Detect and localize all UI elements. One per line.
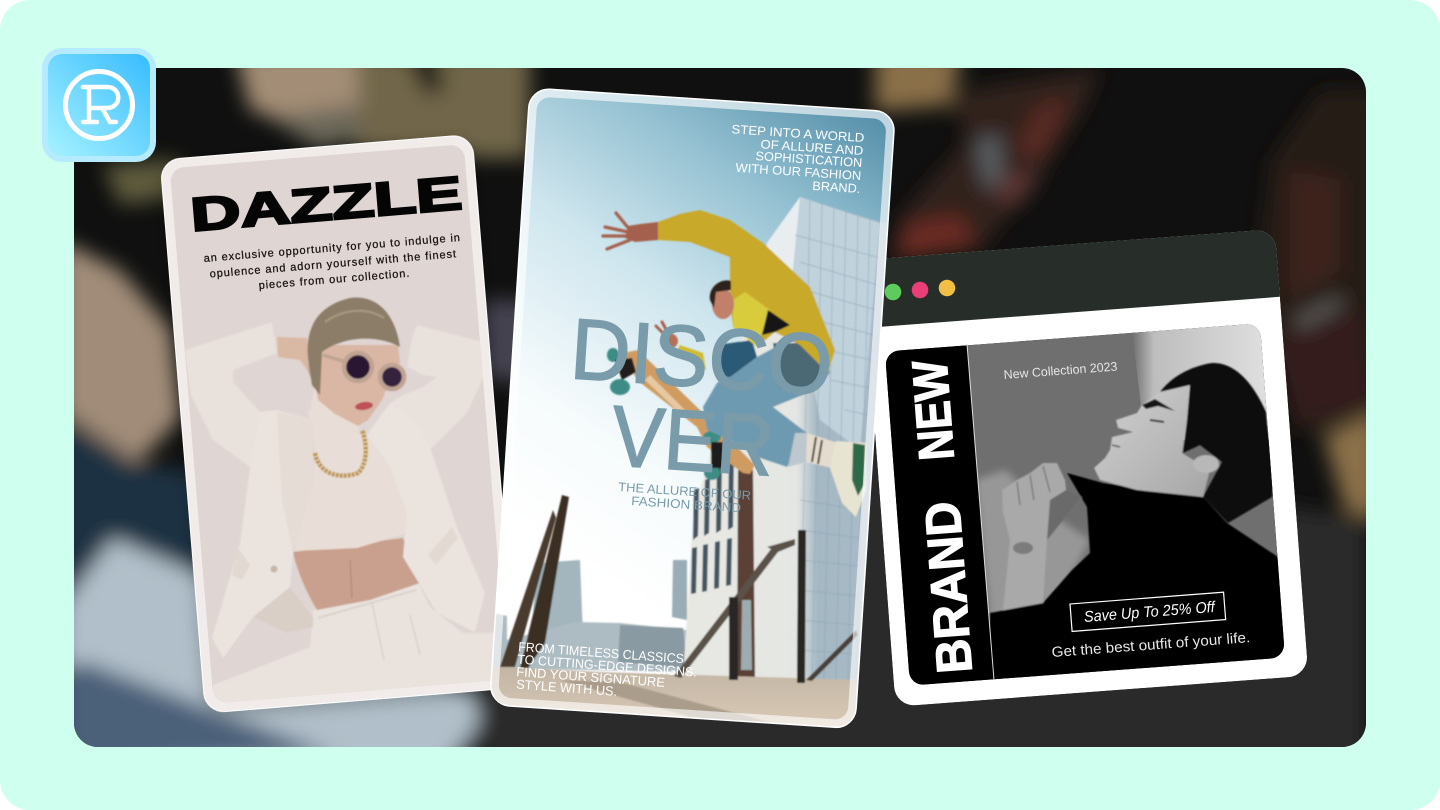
laptop bbox=[60, 538, 480, 770]
railing posts left bbox=[520, 495, 569, 668]
crop top bbox=[295, 410, 407, 551]
card: Discover poster bbox=[480, 80, 910, 740]
head bbox=[712, 289, 734, 319]
distant buildings bbox=[530, 560, 584, 650]
black title strip bbox=[870, 330, 994, 700]
windows bbox=[691, 448, 734, 594]
ear bbox=[1193, 455, 1219, 473]
left pocket flap bbox=[232, 550, 249, 579]
bottom text: TO CUTTING-EDGE DESIGNS. bbox=[517, 652, 697, 680]
vertical title: NEW bbox=[902, 358, 965, 462]
face bbox=[314, 345, 400, 426]
neck bbox=[312, 388, 358, 431]
sock bbox=[806, 433, 838, 468]
divider line bbox=[967, 344, 994, 680]
lips line bbox=[1112, 445, 1120, 447]
heading: DISCOVER: VER bbox=[609, 388, 777, 495]
poster description: pieces from our collection. bbox=[258, 268, 410, 292]
card: Dazzle poster bbox=[160, 135, 502, 721]
vertical title bbox=[902, 358, 983, 675]
top text: SOPHISTICATION bbox=[755, 149, 863, 170]
bare midriff bbox=[293, 538, 420, 610]
sunglasses bbox=[323, 353, 404, 389]
tagline: Get the best outfit of your life. bbox=[1051, 630, 1251, 661]
subheading: FASHION BRAND bbox=[631, 494, 741, 515]
pants bbox=[212, 584, 494, 702]
poster background and model bbox=[170, 145, 498, 702]
vertical title: BRAND bbox=[914, 500, 983, 675]
heading: DISCOVER bbox=[568, 301, 835, 495]
left sleeve bbox=[185, 322, 277, 467]
jeans bbox=[703, 343, 830, 467]
keyboard bbox=[74, 652, 328, 747]
door column bbox=[737, 470, 755, 678]
poster description: an exclusive opportunity for you to indulge in bbox=[203, 232, 460, 265]
card frame bbox=[490, 88, 895, 729]
sweater bbox=[989, 472, 1284, 680]
top text: BRAND. bbox=[812, 179, 861, 196]
top text: STEP INTO A WORLD bbox=[731, 122, 865, 145]
right plaid fabric bbox=[1255, 90, 1376, 433]
left hand bbox=[603, 213, 658, 249]
fist and arm bbox=[1002, 463, 1082, 610]
discount box: Save Up To 25% Off bbox=[1083, 599, 1217, 626]
discount box bbox=[1070, 592, 1226, 631]
cuff bbox=[788, 433, 808, 467]
eyebrow and eye bbox=[1142, 399, 1175, 411]
poster photo bbox=[480, 80, 910, 740]
navy jeans bbox=[74, 414, 194, 609]
necklace bbox=[315, 430, 366, 476]
button bbox=[270, 566, 278, 572]
poster description: opulence and adorn yourself with the finest bbox=[209, 248, 456, 280]
left hand bbox=[276, 336, 309, 372]
lips bbox=[355, 401, 373, 411]
grey gap between cards bbox=[486, 288, 516, 392]
right jacket bbox=[367, 403, 485, 632]
window body bbox=[862, 229, 1308, 707]
left jacket bbox=[212, 410, 294, 657]
bottom text bbox=[516, 639, 697, 699]
window buttons bbox=[885, 280, 955, 300]
card: browser window ad bbox=[862, 229, 1308, 707]
ad photo panel bbox=[886, 324, 1284, 685]
lower sleeve bbox=[676, 345, 706, 370]
card frame bbox=[160, 134, 517, 713]
skateboard bbox=[623, 350, 755, 474]
collection label: New Collection 2023 bbox=[1003, 359, 1118, 382]
bottom text: FIND YOUR SIGNATURE bbox=[516, 664, 666, 690]
bottom text: FROM TIMELESS CLASSICS bbox=[518, 639, 685, 666]
shoe bbox=[830, 441, 866, 517]
sweatshirt bbox=[658, 210, 835, 373]
poster description bbox=[203, 232, 460, 292]
top text: OF ALLURE AND bbox=[760, 137, 864, 158]
bottom text: STYLE WITH US. bbox=[516, 677, 618, 699]
right hand bbox=[656, 322, 678, 349]
left arm bbox=[60, 240, 182, 464]
right sleeve bbox=[390, 325, 488, 450]
tower grid bbox=[795, 200, 880, 680]
top text bbox=[731, 122, 865, 196]
top text: WITH OUR FASHION bbox=[735, 161, 862, 183]
heading: DAZZLE: DAZZLE bbox=[188, 166, 464, 241]
hair bbox=[308, 297, 400, 395]
logo badge bbox=[42, 48, 156, 162]
plaid sleeve bbox=[888, 68, 1100, 262]
hair bbox=[1160, 363, 1273, 523]
upper right tan bbox=[875, 50, 963, 112]
face bbox=[1094, 383, 1210, 497]
ground bbox=[490, 666, 860, 735]
top left tan and hat bbox=[353, 50, 530, 158]
tower upper bbox=[683, 197, 890, 690]
heading: DISCOVER: DISCO bbox=[568, 301, 835, 414]
subheading: THE ALLURE OF OUR bbox=[618, 480, 751, 503]
subheading bbox=[618, 480, 751, 515]
railing right bbox=[797, 530, 806, 683]
lower right dark table bbox=[440, 440, 1366, 760]
